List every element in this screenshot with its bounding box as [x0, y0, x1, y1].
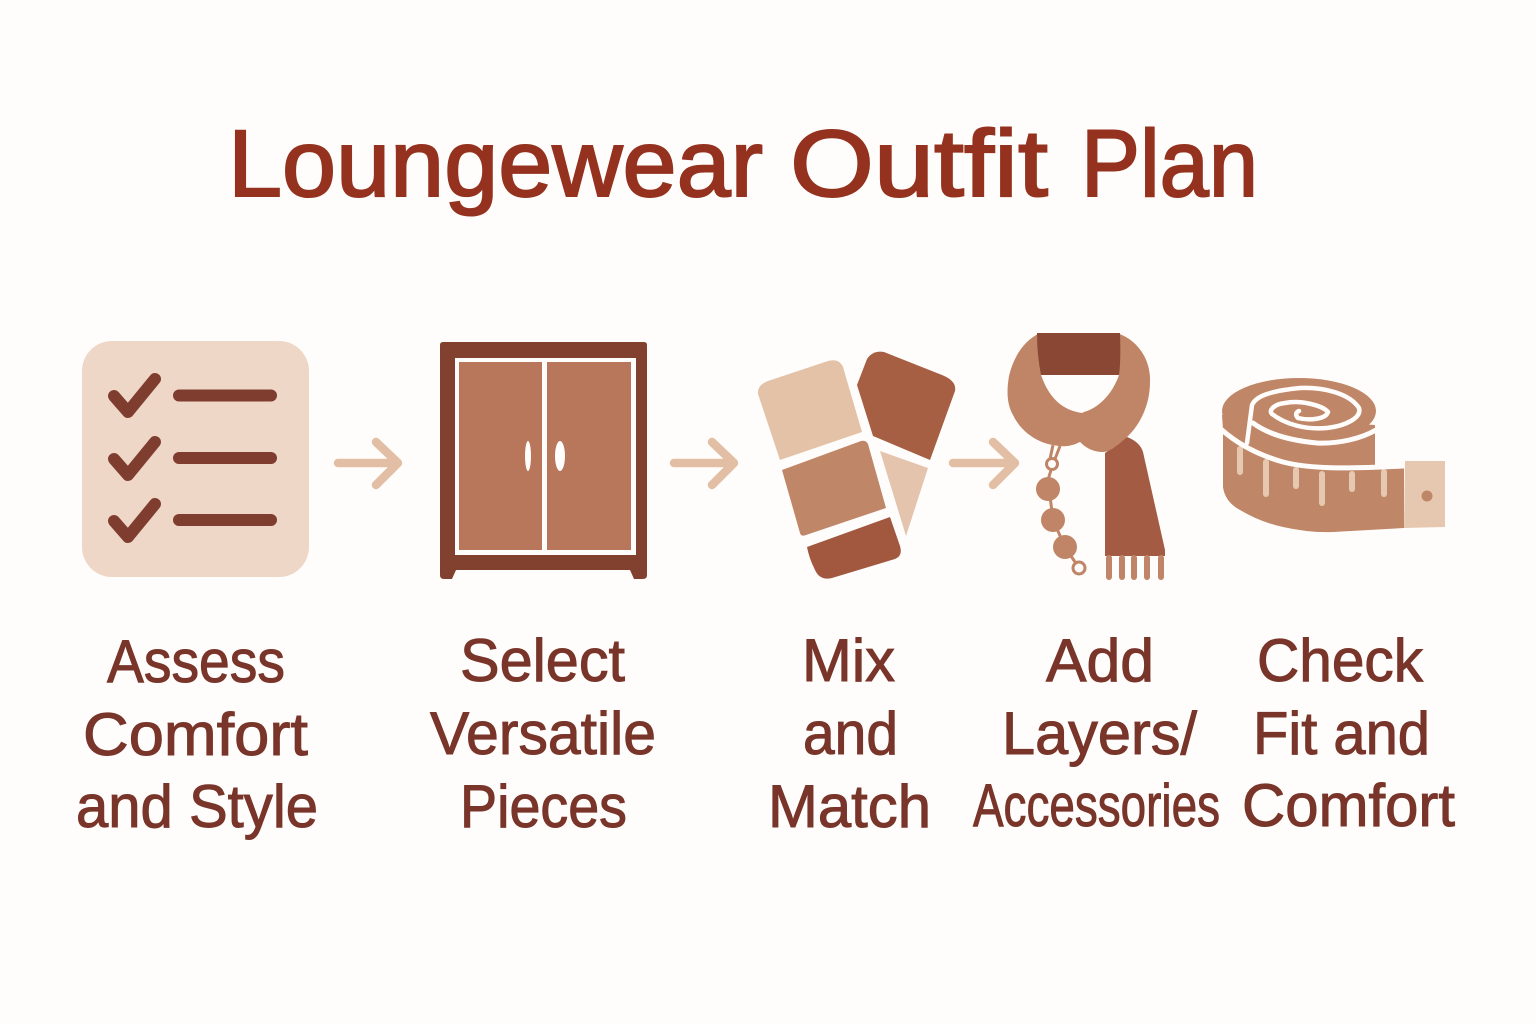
tape spiral: [1222, 388, 1404, 468]
label: step 3: and: [803, 700, 898, 767]
label: step 2: Pieces: [460, 773, 627, 840]
label: step 5: Fit and: [1253, 700, 1430, 767]
label: step 1: and Style: [76, 773, 318, 840]
label: step 3: Match: [768, 773, 931, 840]
icon: fabric swatches: [758, 352, 955, 579]
arrow 2: [674, 442, 734, 485]
label: step 5: Comfort: [1242, 772, 1455, 839]
label: step 4: Layers/: [1002, 700, 1197, 767]
title: Outfit: [790, 111, 1048, 217]
label: step 2: [430, 627, 656, 840]
title: Loungewear: [228, 111, 763, 217]
label: step 3: [768, 627, 931, 840]
label: step 4: Add: [1046, 627, 1154, 694]
icon: wardrobe: [440, 342, 647, 579]
title: [228, 111, 1258, 217]
arrow 3: [953, 442, 1015, 485]
label: step 2: Versatile: [430, 700, 656, 767]
label: step 4: [973, 627, 1220, 839]
label: step 1: Comfort: [83, 701, 308, 768]
tape ticks: [1240, 449, 1384, 503]
icon: scarf and necklace: [1008, 333, 1165, 577]
label: step 1: Assess: [107, 628, 285, 695]
label: step 2: Select: [460, 627, 625, 694]
arrow 1: [338, 442, 398, 485]
necklace: [1036, 445, 1085, 574]
icon: checklist: [82, 341, 309, 577]
label: step 3: Mix: [802, 627, 895, 694]
label: step 5: Check: [1257, 627, 1424, 694]
title: Plan: [1081, 111, 1258, 217]
label: step 5: [1242, 627, 1455, 839]
icon: measuring tape: [1222, 378, 1445, 532]
label: step 4: Accessories: [973, 772, 1220, 839]
label: step 1: [76, 628, 318, 840]
